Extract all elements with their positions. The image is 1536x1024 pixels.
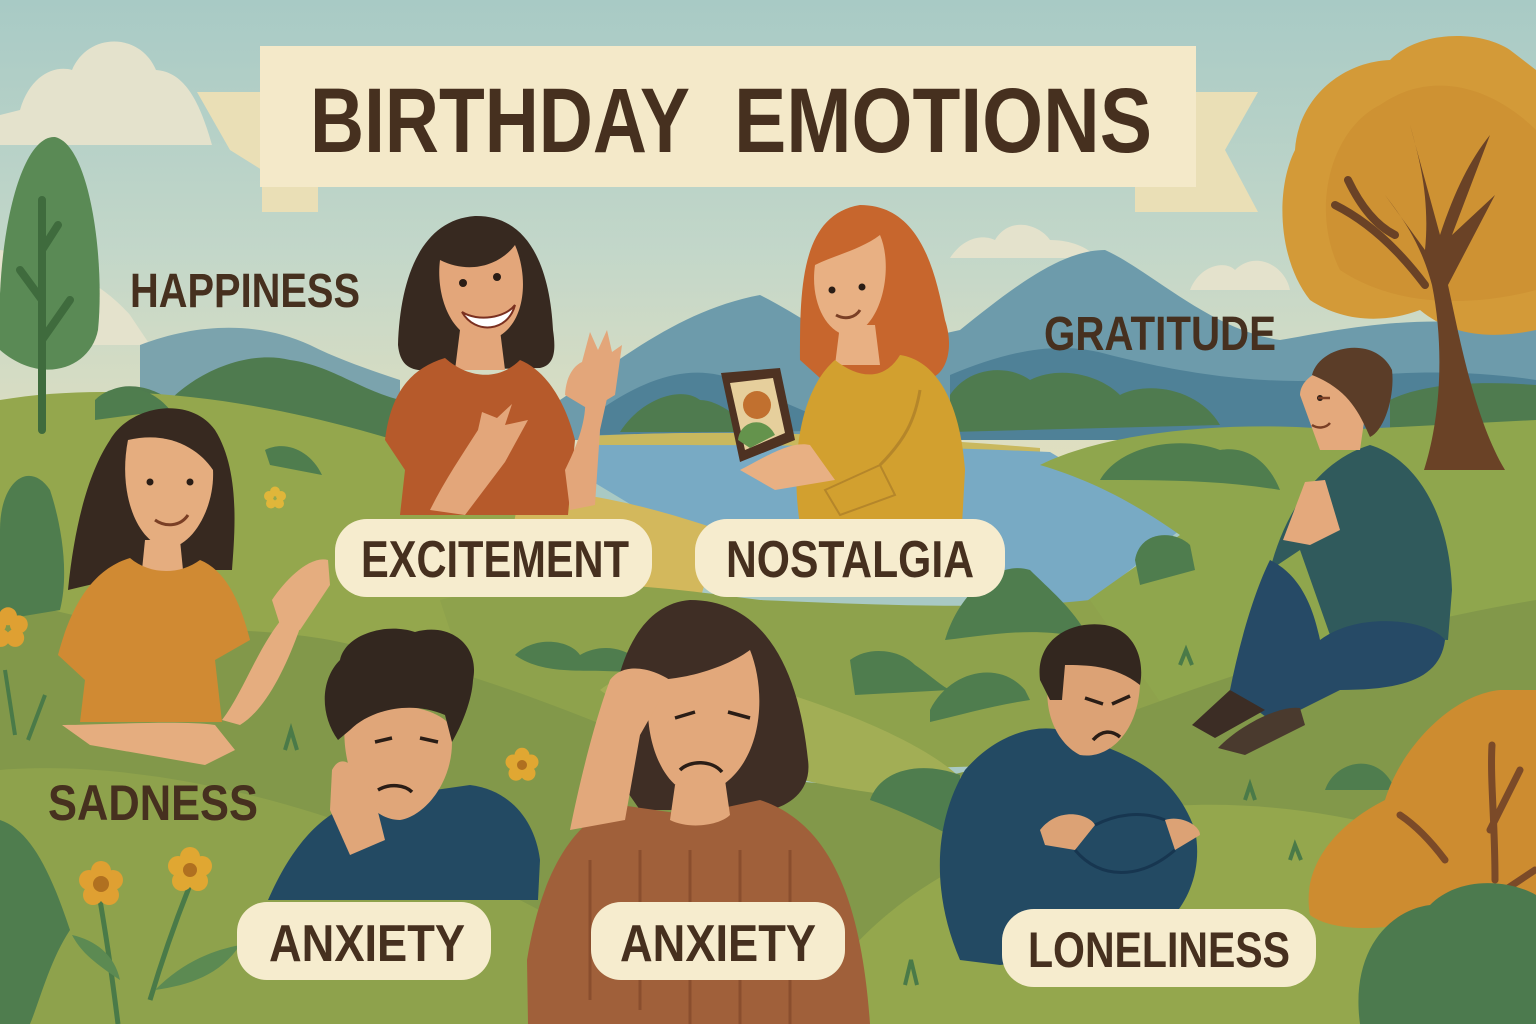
lake (590, 445, 1180, 610)
bush front (1358, 883, 1536, 1024)
pill: nostalgia (695, 519, 1005, 597)
photo frame (721, 368, 795, 462)
person: gratitude (1192, 348, 1452, 755)
title: BIRTHDAY (310, 70, 690, 172)
pill: excitement (335, 519, 652, 597)
background sky (0, 0, 1536, 460)
pill: loneliness (1002, 909, 1316, 987)
person: happiness girl (58, 408, 330, 765)
ribbon tails (197, 92, 1258, 212)
pill: loneliness: LONELINESS (1028, 922, 1290, 978)
label: sadness: SADNESS (48, 775, 258, 831)
hills (0, 420, 1536, 1024)
tree right: autumn (1282, 36, 1536, 470)
flowers and grass (0, 486, 1301, 1024)
clouds (0, 42, 1290, 345)
person: nostalgia (721, 205, 965, 525)
person: anxiety centre (527, 600, 870, 1024)
pill: anxiety centre: ANXIETY (620, 915, 816, 973)
banner (197, 46, 1258, 212)
pill: anxiety centre (591, 902, 845, 980)
label: happiness: HAPPINESS (130, 265, 360, 318)
person: loneliness (940, 624, 1200, 965)
orange bush bottom right (1309, 690, 1536, 930)
title (310, 70, 1152, 172)
pill: anxiety left: ANXIETY (269, 915, 465, 973)
label: gratitude: GRATITUDE (1044, 308, 1276, 361)
banner face (260, 46, 1196, 187)
tree left: green (0, 137, 100, 430)
title: EMOTIONS (734, 70, 1152, 172)
person: anxiety left (268, 629, 540, 900)
distant treeline (90, 357, 1536, 440)
bush branches (1400, 745, 1535, 900)
pill: anxiety left (237, 902, 491, 980)
person: excitement (385, 216, 622, 515)
hills back (0, 392, 560, 1024)
pill: excitement: EXCITEMENT (361, 531, 629, 589)
pill: nostalgia: NOSTALGIA (726, 531, 974, 589)
mountains (140, 250, 1536, 440)
bushes (0, 388, 1395, 1024)
far bank (590, 433, 1040, 460)
